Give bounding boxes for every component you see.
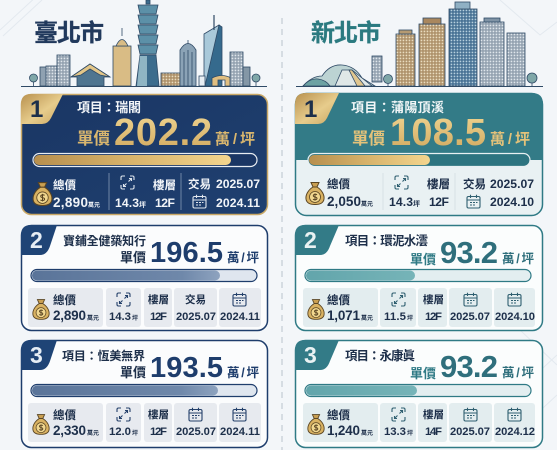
unit price <box>120 237 259 269</box>
stat: transaction date: 2025.07 <box>176 426 216 438</box>
stat: listing date <box>495 408 535 438</box>
unit price: 萬/坪 <box>227 250 259 265</box>
stat: total price: 總價 <box>53 293 76 307</box>
heading: New Taipei City: 新北市 <box>311 20 381 47</box>
unit price: 萬/坪 <box>490 131 530 148</box>
project name: 項目：永康眞 <box>345 348 415 363</box>
unit price: 萬/坪 <box>502 365 534 380</box>
unit price <box>77 112 255 154</box>
stat: floor <box>423 408 444 438</box>
stat: total price: 萬元 <box>88 201 100 209</box>
rank badge 1 <box>295 93 339 124</box>
unit price: 單價 <box>120 250 146 265</box>
stat: area: 坪 <box>132 314 138 322</box>
unit price <box>410 235 534 270</box>
stat: transaction date <box>176 293 216 323</box>
stat: total price: 總價 <box>327 293 350 307</box>
illustration: Taipei skyline <box>21 0 267 86</box>
stat boxes <box>303 403 535 442</box>
stat: floor: 樓層 <box>423 408 444 421</box>
stat: listing date: 2024.11 <box>220 426 260 438</box>
price bar <box>305 270 531 282</box>
price bar <box>33 154 257 166</box>
stat: listing date <box>220 293 260 323</box>
stat: area and floor: 樓層 <box>427 177 450 191</box>
rank badge 2 <box>295 225 339 255</box>
stat: floor: 樓層 <box>423 293 444 306</box>
rank badge 3 <box>295 340 339 370</box>
unit price <box>120 352 259 384</box>
stat: transaction date: 2025.07 <box>450 426 490 438</box>
stat: area: 坪 <box>407 314 413 322</box>
unit price: 單價 <box>77 129 110 148</box>
stat: area and floor: 樓層 <box>153 178 176 192</box>
stat boxes <box>28 288 261 327</box>
price bar <box>31 384 257 396</box>
stat: area and floor <box>115 176 176 210</box>
unit price: 單價 <box>120 365 146 380</box>
stat: area: 坪 <box>407 429 413 437</box>
unit price: 202.2 <box>114 112 212 154</box>
panel: New Taipei rank 1 <box>295 93 543 216</box>
rank badge 3 <box>21 340 57 370</box>
stat: transaction date <box>176 408 216 438</box>
stat: floor: 樓層 <box>148 408 169 421</box>
stat: floor: 12F <box>150 311 167 323</box>
price bar <box>308 154 530 166</box>
panel: New Taipei rank 2 <box>295 225 542 330</box>
unit price: 單價 <box>410 252 436 267</box>
project name: 項目：瑞閣 <box>77 100 141 115</box>
illustration: New Taipei skyline <box>296 2 543 86</box>
project name: 項目：環泥水澐 <box>345 233 428 248</box>
unit price <box>410 349 534 384</box>
stat: total price: 2,330 <box>53 423 86 438</box>
stat: transaction dates: 2024.10 <box>490 195 534 209</box>
stat: listing date <box>220 408 260 438</box>
rank badge 1 <box>21 94 63 124</box>
stat: area and floor: 12F <box>429 195 449 209</box>
stat: total price: 2,890 <box>53 195 88 210</box>
unit price: 196.5 <box>150 237 223 269</box>
stat: total price: 萬元 <box>87 429 99 437</box>
stat: total price: 總價 <box>53 178 76 192</box>
stat: total price: 萬元 <box>361 429 373 437</box>
stat: area: 11.5 <box>384 311 407 323</box>
rank badge 1: 1 <box>304 96 317 123</box>
unit price: 93.2 <box>440 349 498 384</box>
stat: total price <box>33 293 99 323</box>
stat: total price <box>306 177 373 209</box>
stat: transaction dates: 交易 <box>463 177 486 191</box>
panel: Taipei rank 1 <box>21 94 268 214</box>
unit price: 萬/坪 <box>227 365 259 380</box>
stat: total price <box>33 178 100 210</box>
price bar <box>305 384 531 396</box>
stat: floor: 12F <box>150 426 167 438</box>
project name: 項目：蒲陽頂溪 <box>351 100 444 115</box>
stat: floor: 樓層 <box>148 293 169 306</box>
stat: floor <box>423 293 444 323</box>
stat: total price: 萬元 <box>361 314 373 322</box>
stat: area and floor: 12F <box>155 196 175 210</box>
price bar <box>31 270 257 282</box>
stat: area and floor: 坪 <box>413 199 420 208</box>
stat: area: 12.0 <box>109 426 131 438</box>
stat: area: 13.3 <box>384 426 406 438</box>
stat: total price: 1,071 <box>327 308 360 323</box>
stat: total price: 總價 <box>327 408 350 422</box>
stat: total price: 2,890 <box>53 308 86 323</box>
stat: transaction date: 交易 <box>185 293 206 306</box>
unit price: 93.2 <box>440 235 498 270</box>
panel: Taipei rank 3 <box>21 340 268 448</box>
stat: area <box>109 408 138 438</box>
stat: transaction dates: 交易 <box>188 177 211 191</box>
stat: total price <box>308 408 373 438</box>
stat: transaction date: 2025.07 <box>176 311 216 323</box>
rank badge 2: 2 <box>30 227 43 253</box>
stat: total price <box>308 293 373 323</box>
stat: area: 坪 <box>132 429 138 437</box>
stat: total price: 總價 <box>53 408 76 422</box>
unit price: 108.5 <box>390 112 486 154</box>
stat: area and floor: 14.3 <box>115 196 139 210</box>
rank badge 3: 3 <box>304 342 317 368</box>
stat: area and floor: 坪 <box>139 200 146 209</box>
stat: area and floor <box>389 176 450 209</box>
stat: transaction date <box>450 408 490 438</box>
stat: total price: 1,240 <box>327 423 360 438</box>
stat: listing date: 2024.12 <box>495 426 535 438</box>
unit price <box>352 112 530 154</box>
stat: transaction dates <box>463 177 534 209</box>
stat: transaction dates: 2025.07 <box>216 177 260 191</box>
unit price: 193.5 <box>150 352 223 384</box>
stat: area <box>384 408 413 438</box>
stat: area: 14.3 <box>109 311 131 323</box>
stat: transaction dates: 2024.11 <box>216 196 260 210</box>
stat: total price: 萬元 <box>361 200 373 208</box>
project name: 項目：恆美無界 <box>62 348 145 363</box>
stat: floor <box>148 408 169 438</box>
unit price: 萬/坪 <box>215 131 255 148</box>
rank badge 2 <box>21 225 57 255</box>
rank badge 2: 2 <box>304 227 317 253</box>
stat: total price: 萬元 <box>87 314 99 322</box>
heading: Taipei City: 臺北市 <box>34 20 104 47</box>
stat boxes <box>28 403 261 442</box>
panel: Taipei rank 2 <box>21 225 268 330</box>
stat: floor <box>148 293 169 323</box>
stat: total price: 2,050 <box>327 194 361 209</box>
stat: transaction dates: 2025.07 <box>490 177 534 191</box>
unit price: 萬/坪 <box>502 251 534 266</box>
stat: area <box>109 293 138 323</box>
stat: area <box>384 293 413 323</box>
stat: floor: 14F <box>425 426 442 438</box>
stat: transaction date: 2025.07 <box>450 311 490 323</box>
stat: total price: 總價 <box>327 177 350 191</box>
stat: area and floor: 14.3 <box>389 195 413 209</box>
rank badge 1: 1 <box>30 96 43 123</box>
unit price: 單價 <box>352 129 386 148</box>
stat: listing date <box>495 293 535 323</box>
panel: New Taipei rank 3 <box>295 340 542 448</box>
stat: floor: 12F <box>425 311 442 323</box>
project name: 寶鋪全健築知行 <box>63 233 146 248</box>
stat: transaction dates <box>188 177 260 210</box>
rank badge 3: 3 <box>30 342 43 368</box>
stat: total price <box>33 408 99 438</box>
stat boxes <box>303 288 535 327</box>
stat: listing date: 2024.11 <box>220 311 260 323</box>
stat: listing date: 2024.10 <box>495 311 535 323</box>
unit price: 單價 <box>410 366 436 381</box>
stat: transaction date <box>450 293 490 323</box>
